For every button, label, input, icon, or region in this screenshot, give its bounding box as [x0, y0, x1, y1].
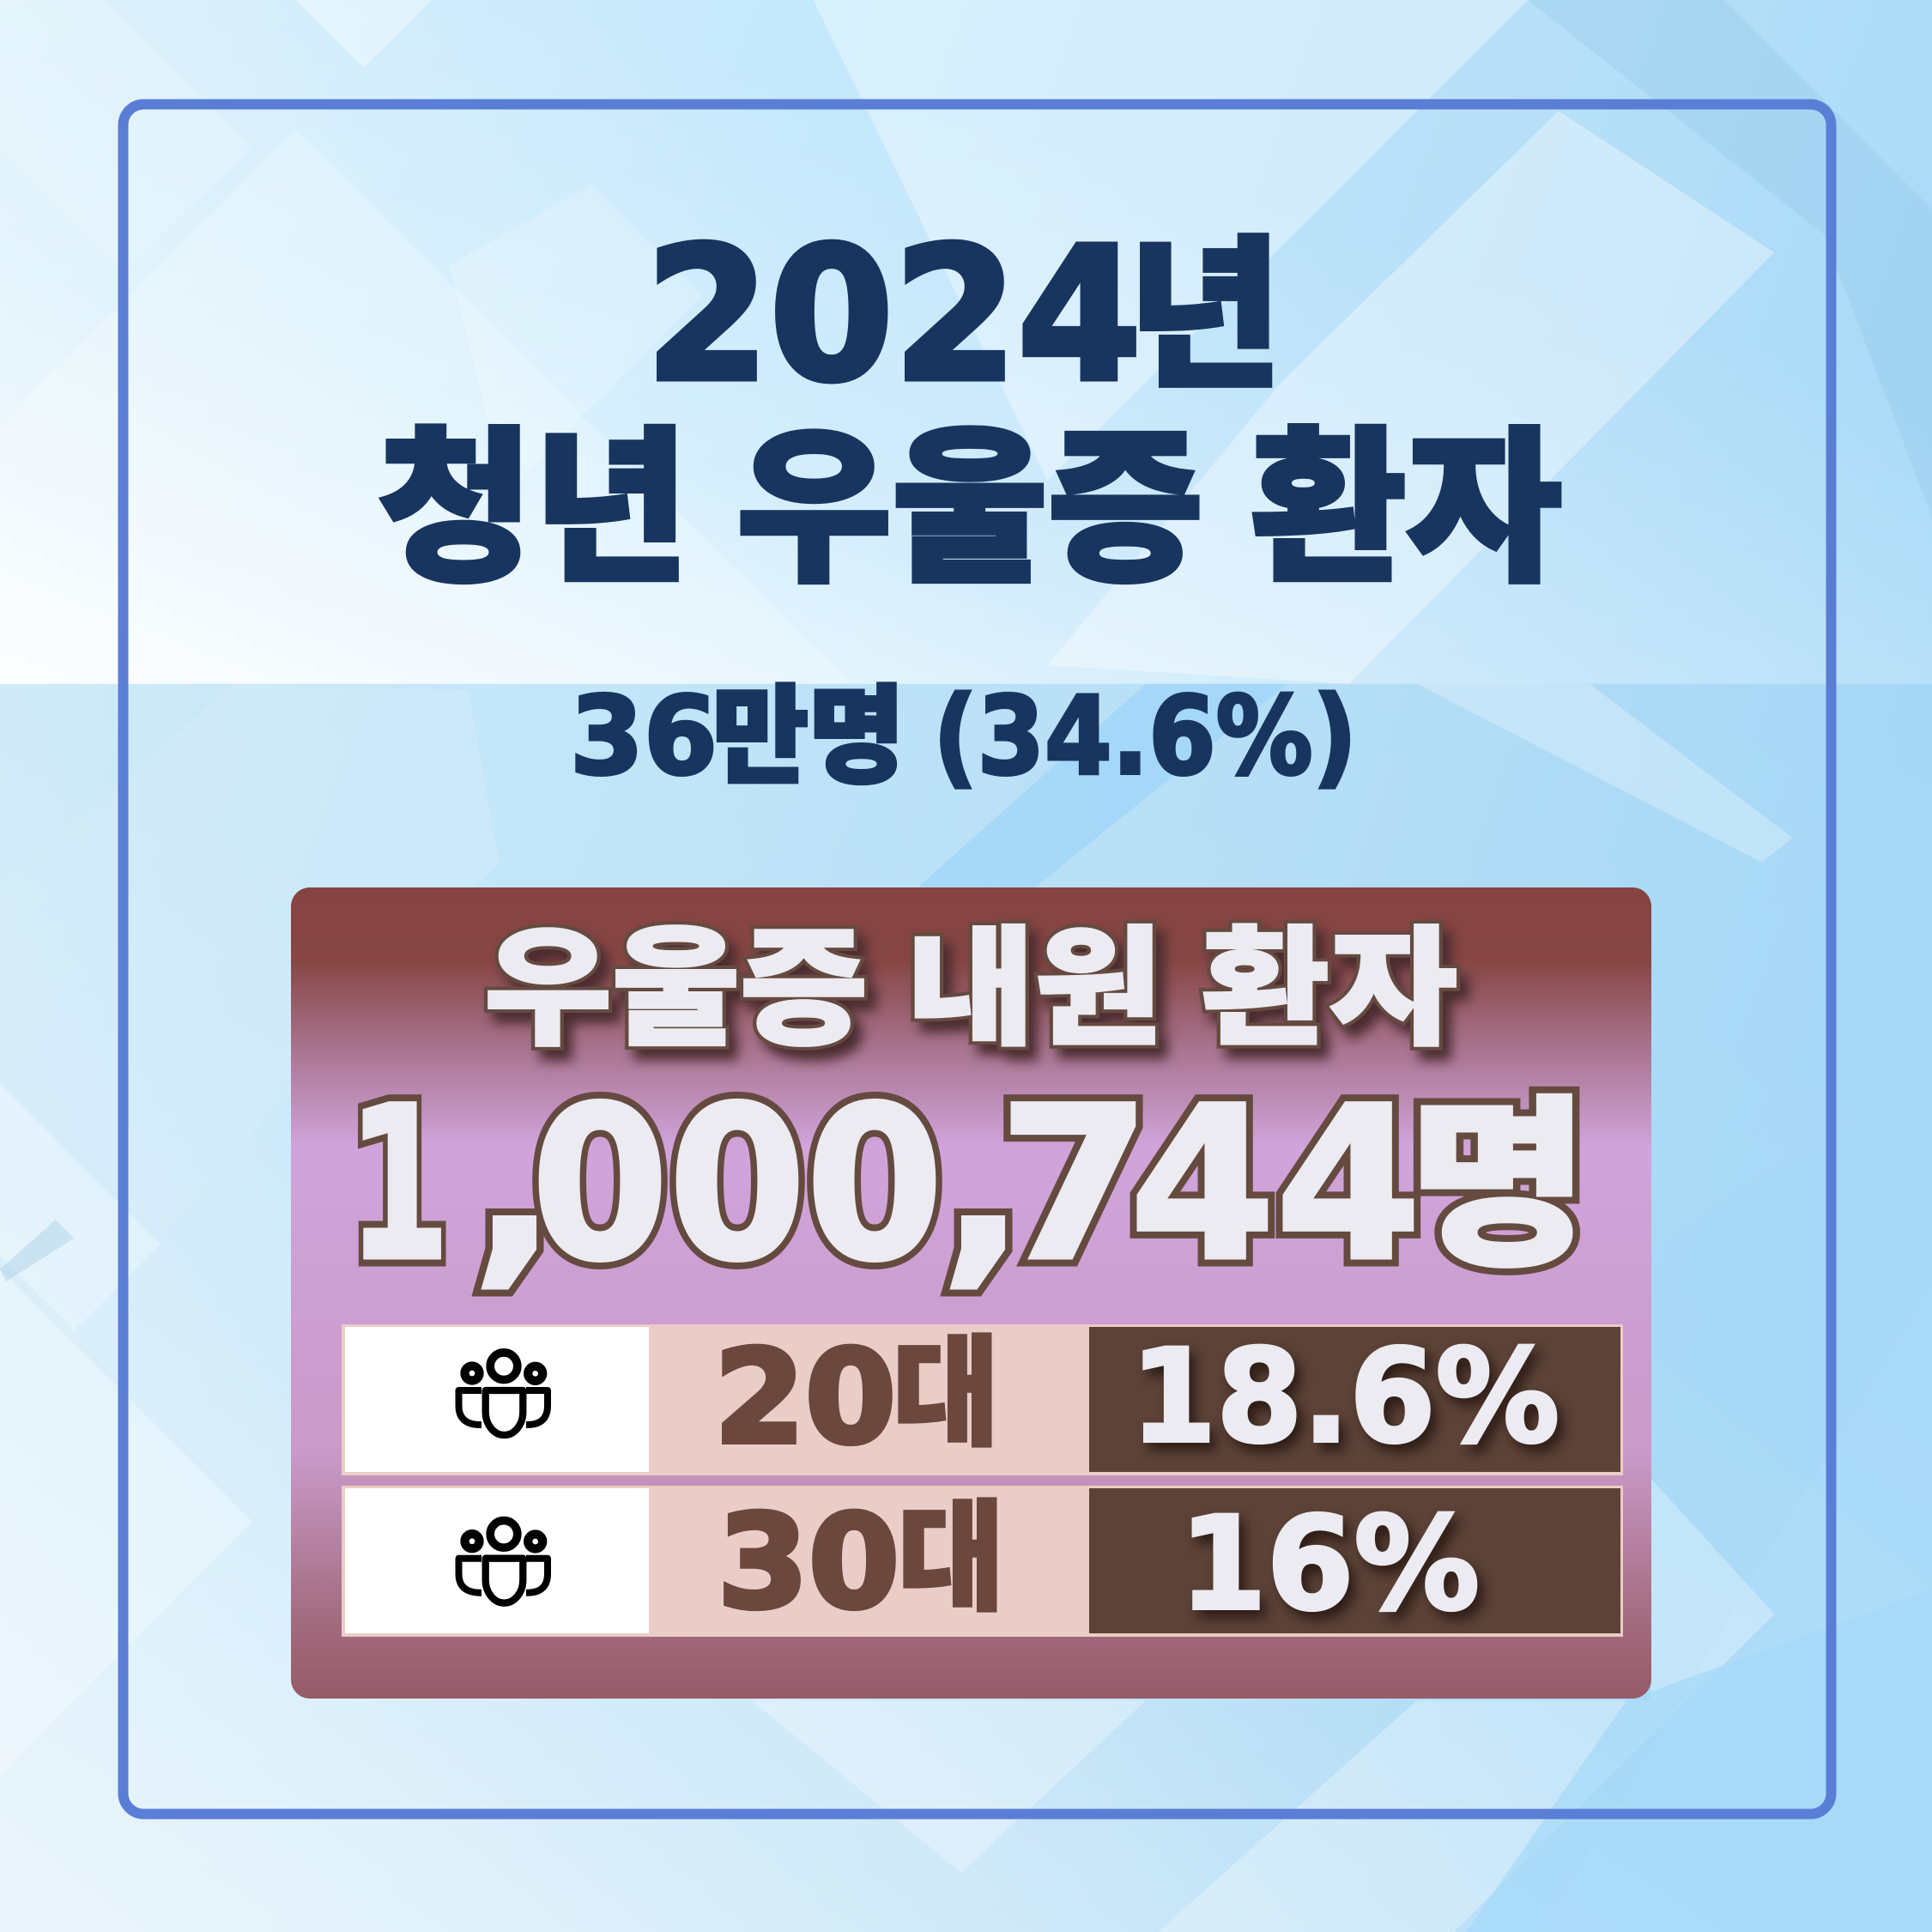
- row background: [342, 1324, 1623, 1475]
- panel background: [291, 887, 1651, 1699]
- panel heading: 우울증 내원 환자: [484, 885, 1457, 1071]
- total patient count: 44: [1130, 1063, 1421, 1308]
- total patient count: 000: [531, 1063, 943, 1308]
- total patient count: 7: [998, 1063, 1151, 1308]
- value cell: [1089, 1327, 1620, 1472]
- total patient count: 명: [1409, 1039, 1588, 1302]
- total patient count: ,: [941, 1063, 1026, 1308]
- row: 20s: [342, 1297, 1623, 1475]
- row: 30s: [342, 1462, 1623, 1639]
- total patient count: ,: [472, 1063, 557, 1308]
- total patient count: 명: [1409, 1039, 1588, 1302]
- icon cell: [345, 1488, 649, 1633]
- total patient count: 44: [1130, 1063, 1421, 1308]
- age label: 20: [714, 1323, 896, 1473]
- total patient count: 7: [998, 1063, 1151, 1308]
- title line 1: 2024: [645, 209, 1142, 422]
- total patient count: ,: [472, 1063, 557, 1308]
- age label: [718, 1462, 1004, 1638]
- age label: [714, 1297, 999, 1473]
- icon: people group: [458, 1353, 548, 1435]
- percentage: 18.6%: [1130, 1323, 1560, 1472]
- total patient count: 000: [531, 1063, 943, 1308]
- panel heading: 우울증 내원 환자: [484, 885, 1457, 1071]
- total patient count: [348, 1039, 1588, 1308]
- subtitle: 만명: [712, 650, 905, 804]
- subtitle: (34.6%): [899, 673, 1357, 799]
- value cell: [1089, 1488, 1620, 1633]
- title line 2: 청년 우울증 환자: [378, 373, 1562, 615]
- percentage: 16%: [1179, 1490, 1480, 1639]
- total patient count: 1: [348, 1063, 450, 1308]
- subtitle: 36: [570, 673, 718, 799]
- row background: [342, 1486, 1623, 1637]
- age label: 대: [893, 1297, 999, 1470]
- icon cell: [345, 1327, 649, 1472]
- title line 1: 년: [1128, 184, 1282, 420]
- age label: 30: [718, 1488, 899, 1638]
- total patient count: 1: [348, 1063, 450, 1308]
- panel: depression outpatients: [291, 885, 1651, 1699]
- total patient count: ,: [941, 1063, 1026, 1308]
- age label: 대: [898, 1462, 1004, 1635]
- outer rounded frame: [124, 105, 1832, 1814]
- icon: people group: [458, 1521, 548, 1603]
